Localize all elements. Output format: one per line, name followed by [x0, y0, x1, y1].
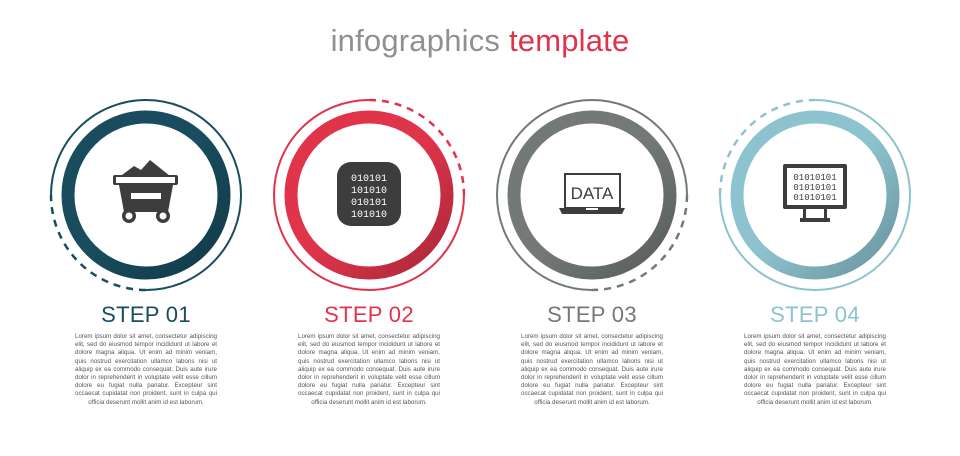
step 2 text: Lorem ipsum dolor sit amet, consectetur adipiscing elit, sed do eiusmod tempor incididunt ut labore et dolore magna aliqua. Ut enim ad minim veniam, quis nostrud exercitation ullamco laboris nisi ut aliquip ex ea commodo consequat. Duis aute irure dolor in reprehenderit in voluptate velit esse cillum dolore eu fugiat nulla pariatur. Excepteur sint occaecat cupidatat non proident, sunt in culpa qui officia deserunt mollit anim id est laborum. — [298, 333, 440, 406]
icon: binary chip: 101010 — [351, 210, 387, 221]
icon: binary chip: 010101 — [351, 174, 387, 185]
step 3 text: Lorem ipsum dolor sit amet, consectetur adipiscing elit, sed do eiusmod tempor incididunt ut labore et dolore magna aliqua. Ut enim ad minim veniam, quis nostrud exercitation ullamco laboris nisi ut aliquip ex ea commodo consequat. Duis aute irure dolor in reprehenderit in voluptate velit esse cillum dolore eu fugiat nulla pariatur. Excepteur sint occaecat cupidatat non proident, sunt in culpa qui officia deserunt mollit anim id est laborum. — [521, 333, 663, 406]
icon: laptop data — [559, 174, 625, 214]
step 3 text: STEP 03 — [547, 302, 637, 327]
icon: binary chip: 101010 — [351, 186, 387, 197]
icon: monitor binary: 01010101 — [793, 173, 837, 183]
circles — [50, 98, 911, 292]
icon: laptop data: DATA — [571, 184, 614, 203]
icon: monitor binary — [783, 164, 847, 222]
step 1 text: STEP 01 — [101, 302, 191, 327]
title: infographics template — [331, 23, 629, 58]
step 1 text: Lorem ipsum dolor sit amet, consectetur adipiscing elit, sed do eiusmod tempor incididunt ut labore et dolore magna aliqua. Ut enim ad minim veniam, quis nostrud exercitation ullamco laboris nisi ut aliquip ex ea commodo consequat. Duis aute irure dolor in reprehenderit in voluptate velit esse cillum dolore eu fugiat nulla pariatur. Excepteur sint occaecat cupidatat non proident, sunt in culpa qui officia deserunt mollit anim id est laborum. — [75, 333, 217, 406]
icon: binary chip: 010101 — [351, 198, 387, 209]
circle 1 — [51, 100, 241, 290]
icon: monitor binary: 01010101 — [793, 183, 837, 193]
step 4 text: Lorem ipsum dolor sit amet, consectetur adipiscing elit, sed do eiusmod tempor incididunt ut labore et dolore magna aliqua. Ut enim ad minim veniam, quis nostrud exercitation ullamco laboris nisi ut aliquip ex ea commodo consequat. Duis aute irure dolor in reprehenderit in voluptate velit esse cillum dolore eu fugiat nulla pariatur. Excepteur sint occaecat cupidatat non proident, sunt in culpa qui officia deserunt mollit anim id est laborum. — [744, 333, 886, 406]
icon: mine cart — [113, 160, 178, 223]
circle 2 — [274, 100, 464, 290]
circle 3 — [497, 100, 687, 290]
step 2 text: STEP 02 — [324, 302, 414, 327]
icon: binary chip — [337, 162, 401, 226]
step 4 text: STEP 04 — [770, 302, 860, 327]
circle 4 — [720, 100, 910, 290]
icon: monitor binary: 01010101 — [793, 193, 837, 203]
